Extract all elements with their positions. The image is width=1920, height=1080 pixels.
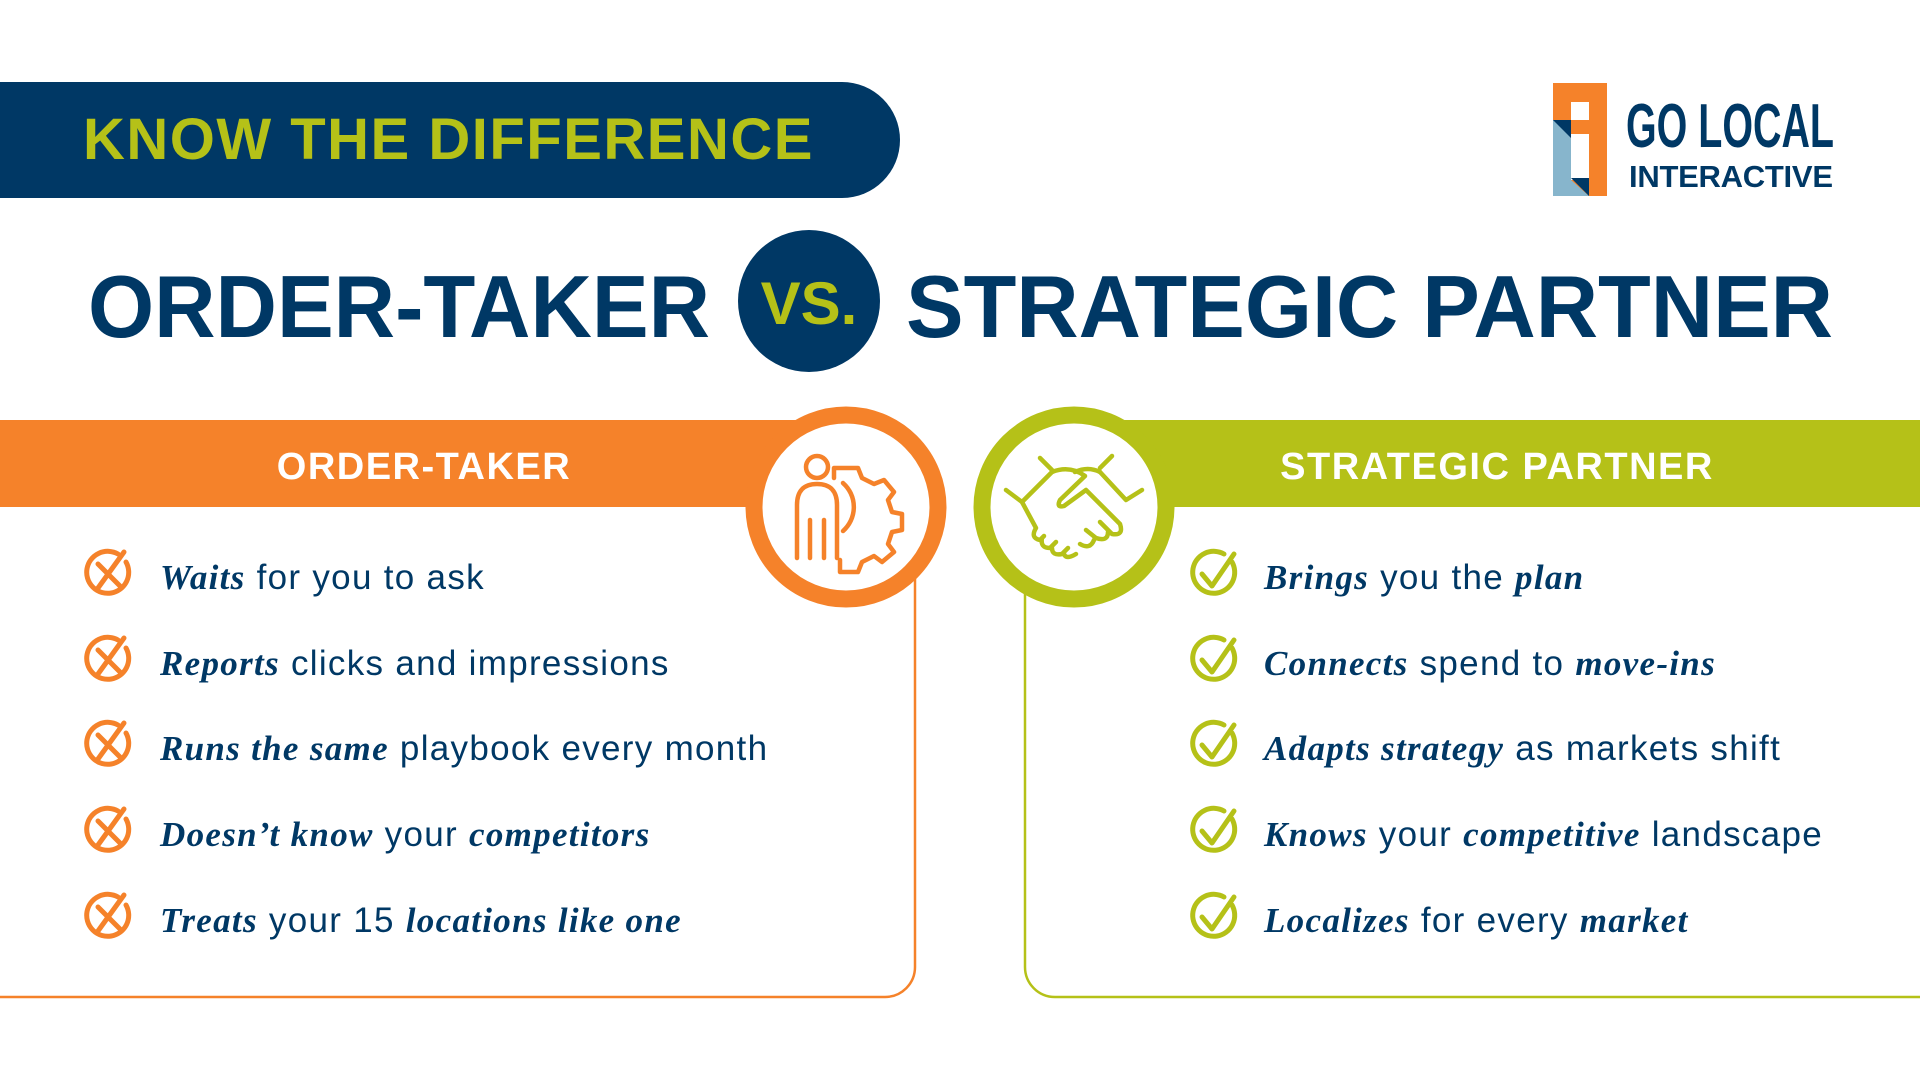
- title banner: [0, 82, 900, 198]
- list: strategic partner: Localizes for every market: [1263, 901, 1689, 940]
- icon: handshake: [982, 415, 1166, 599]
- list: strategic partner: [1193, 551, 1823, 940]
- list: order-taker: [87, 551, 768, 940]
- headline: ORDER-TAKER: [88, 257, 710, 356]
- headline: STRATEGIC PARTNER: [906, 257, 1833, 356]
- list: order-taker: Waits for you to ask: [160, 558, 485, 597]
- list: order-taker: Reports clicks and impressions: [159, 644, 670, 683]
- logo: [1553, 83, 1834, 196]
- panel: order-taker: ORDER-TAKER: [277, 446, 571, 488]
- list: order-taker: Doesn’t know your competitors: [159, 815, 650, 854]
- panel: order-taker: [0, 415, 938, 997]
- icon: person with gear: [754, 415, 938, 599]
- title banner: KNOW THE DIFFERENCE: [83, 107, 814, 172]
- panel: strategic partner: STRATEGIC PARTNER: [1280, 446, 1714, 488]
- list: strategic partner: Adapts strategy as markets shift: [1262, 729, 1781, 768]
- logo: INTERACTIVE: [1629, 159, 1833, 194]
- panel: strategic partner: [982, 415, 1920, 997]
- list: strategic partner: Brings you the plan: [1263, 558, 1584, 597]
- list: order-taker: Treats your 15 locations like one: [160, 901, 682, 940]
- list: strategic partner: Connects spend to move-ins: [1264, 644, 1716, 683]
- list: strategic partner: Knows your competitive landscape: [1263, 815, 1823, 854]
- headline: [88, 230, 1833, 372]
- list: order-taker: Runs the same playbook every month: [159, 729, 768, 768]
- headline: VS.: [761, 270, 857, 337]
